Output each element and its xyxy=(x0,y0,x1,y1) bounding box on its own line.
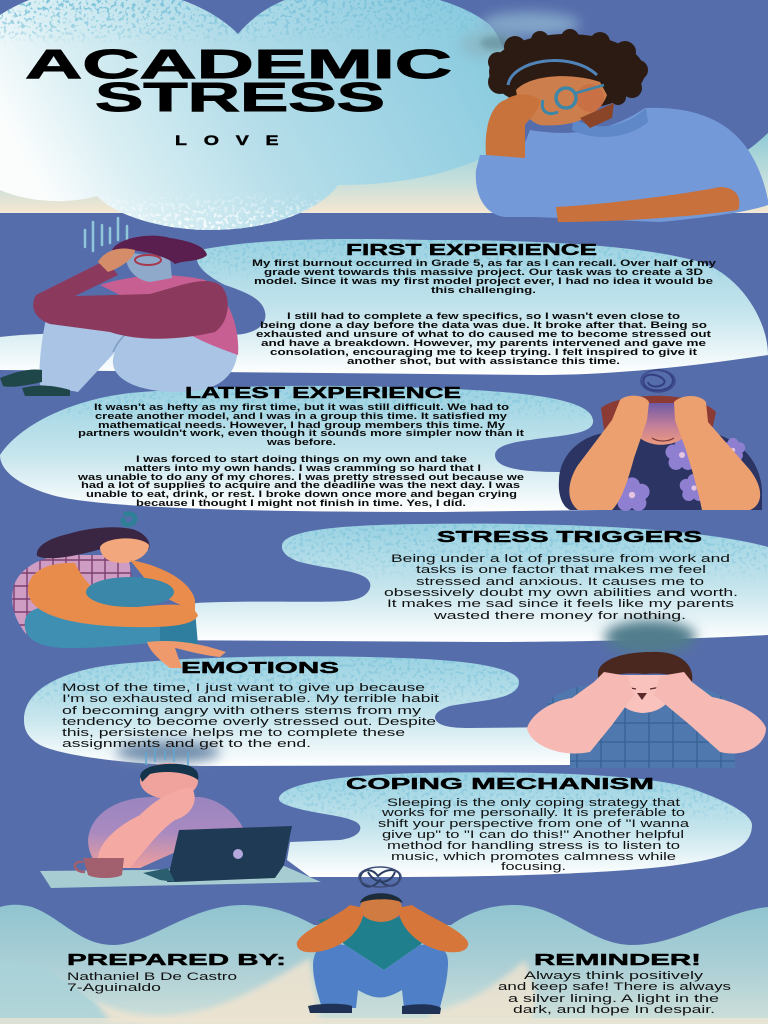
body: emotions: of becoming angry with others stems from my xyxy=(62,705,422,717)
body: stress triggers: Being under a lot of pressure from work and xyxy=(391,553,730,565)
body: latest experience xyxy=(77,402,524,508)
body: emotions: assignments and get to the end. xyxy=(62,738,311,750)
body: latest experience: I was forced to start doing things on my own and take xyxy=(136,454,467,464)
body: first experience: and have a breakdown. However, my parents intervened and gave me xyxy=(261,338,706,348)
panel: first experience background xyxy=(0,238,768,375)
body: latest experience: partners wouldn't work, even though it sounds more simpler now than it xyxy=(78,428,524,438)
body: latest experience: had a lot of supplies to acquire and the deadline was the next day. I was xyxy=(81,480,520,490)
header banner xyxy=(0,0,768,230)
body: first experience: model. Since it was my first model project ever, I had no idea it would be xyxy=(254,276,713,286)
body: stress triggers: stressed and anxious. It causes me to xyxy=(416,576,704,588)
heading: stress triggers: STRESS TRIGGERS xyxy=(437,529,703,546)
body: reminder: dark, and hope In despair. xyxy=(513,1004,715,1016)
illustration: seated man in teal shirt xyxy=(297,867,468,1014)
heading: emotions: EMOTIONS xyxy=(181,660,340,677)
body: first experience: exhausted and unsure of what to do caused me to become stressed out xyxy=(256,329,711,339)
text: coping mechanism xyxy=(346,776,690,873)
body: emotions: this, persistence helps me to complete these xyxy=(62,727,405,739)
panel: emotions background xyxy=(20,655,580,766)
heading: prepared by: PREPARED BY: xyxy=(67,952,286,969)
illustration: person clutching head with floral shirt xyxy=(559,370,762,511)
body: coping mechanism: shift your perspective from one of "I wanna xyxy=(378,818,690,830)
body: first experience: another shot, but with assistance this time. xyxy=(347,356,620,366)
title: STRESS xyxy=(95,74,385,120)
body: first experience: this challenging. xyxy=(431,285,536,295)
illustration: woman rubbing eyes xyxy=(476,29,768,222)
text: reminder xyxy=(498,952,732,1016)
text: prepared by xyxy=(67,952,286,994)
body: stress triggers: obsessively doubt my own abilities and worth. xyxy=(384,587,738,599)
panel: latest experience background xyxy=(0,385,600,512)
text: first experience xyxy=(252,242,716,366)
body: latest experience: because I thought I might not finish in time. Yes, I did. xyxy=(136,498,466,508)
body: latest experience: It wasn't as hefty as my first time, but it was still difficult. We had to xyxy=(94,402,510,412)
heading: reminder: REMINDER! xyxy=(534,952,701,969)
body: coping mechanism: focusing. xyxy=(501,861,566,873)
smoke cloud above head xyxy=(460,12,580,59)
body: first experience: consolation, encouraging me to keep trying. I felt inspired to give it xyxy=(270,347,697,357)
body: latest experience: unable to eat, drink, or rest. I broke down once more and began crying xyxy=(86,489,517,499)
body: stress triggers: tasks is one factor that makes me feel xyxy=(416,564,706,576)
illustration: man holding head in pink xyxy=(527,652,766,768)
illustration: man at laptop xyxy=(40,741,321,888)
body: coping mechanism: Sleeping is the only coping strategy that xyxy=(387,797,680,809)
illustration: woman with head on hand xyxy=(0,218,238,396)
body: coping mechanism: give up" to "I can do this!" Another helpful xyxy=(382,829,684,841)
subtitle: LOVE xyxy=(175,133,279,148)
footer wave band xyxy=(0,905,768,1024)
body: coping mechanism: music, which promotes calmness while xyxy=(391,851,676,863)
body: latest experience: was before. xyxy=(266,437,336,447)
body: coping mechanism: works for me personally. It is preferable to xyxy=(380,807,685,819)
panel: coping mechanism background xyxy=(275,770,755,877)
hero sand and teal backdrop xyxy=(0,133,768,212)
body: latest experience: matters into my own hands. I was cramming so hard that I xyxy=(124,463,481,473)
heading: first experience: FIRST EXPERIENCE xyxy=(346,242,598,259)
heading: coping mechanism: COPING MECHANISM xyxy=(346,776,654,793)
author details: 7-Aguinaldo xyxy=(67,982,161,994)
body: reminder xyxy=(498,970,732,1016)
body: first experience: My first burnout occurred in Grade 5, as far as I can recall. Over half of my xyxy=(252,258,716,268)
body: coping mechanism: method for handling stress is to listen to xyxy=(387,840,680,852)
text: emotions xyxy=(62,660,439,750)
body: emotions xyxy=(62,682,439,750)
body: coping mechanism xyxy=(378,797,690,873)
body: emotions: Most of the time, I just want to give up because xyxy=(62,682,425,694)
body: latest experience: create another model, and I was in a group this time. It satisfied my xyxy=(95,411,507,421)
author details xyxy=(67,971,237,994)
body: latest experience: was unable to do any of my chores. I was pretty stressed out because we xyxy=(77,472,524,482)
body: first experience xyxy=(252,258,716,366)
text: latest experience xyxy=(77,385,524,508)
hero cloud shape xyxy=(0,0,510,230)
title: ACADEMIC xyxy=(25,41,452,87)
body: first experience: being done a day before the data was due. It broke after that. Being so xyxy=(260,320,708,330)
body: emotions: I'm so exhausted and miserable. My terrible habit xyxy=(62,693,439,705)
body: reminder: Always think positively xyxy=(524,970,704,982)
heading: latest experience: LATEST EXPERIENCE xyxy=(185,385,462,402)
body: latest experience: mathematical needs. However, I had group members this time. My xyxy=(98,420,505,430)
body: reminder: a silver lining. A light in the xyxy=(508,993,719,1005)
panel: stress triggers background xyxy=(195,524,768,642)
body: stress triggers: wasted there money for nothing. xyxy=(432,610,686,622)
body: first experience: grade went towards this massive project. Our task was to create a 3D xyxy=(264,267,704,277)
smoke above head xyxy=(604,620,696,654)
author details: Nathaniel B De Castro xyxy=(67,971,237,983)
body: stress triggers: It makes me sad since it feels like my parents xyxy=(387,598,735,610)
illustration: woman hugging knees xyxy=(12,514,226,668)
body: first experience: I still had to complete a few specifics, so I wasn't even close to xyxy=(287,311,681,321)
body: emotions: tendency to become overly stressed out. Despite xyxy=(62,716,436,728)
text: stress triggers xyxy=(384,529,738,622)
body: stress triggers xyxy=(384,553,738,622)
body: reminder: and keep safe! There is always xyxy=(498,981,732,993)
title xyxy=(25,41,452,120)
